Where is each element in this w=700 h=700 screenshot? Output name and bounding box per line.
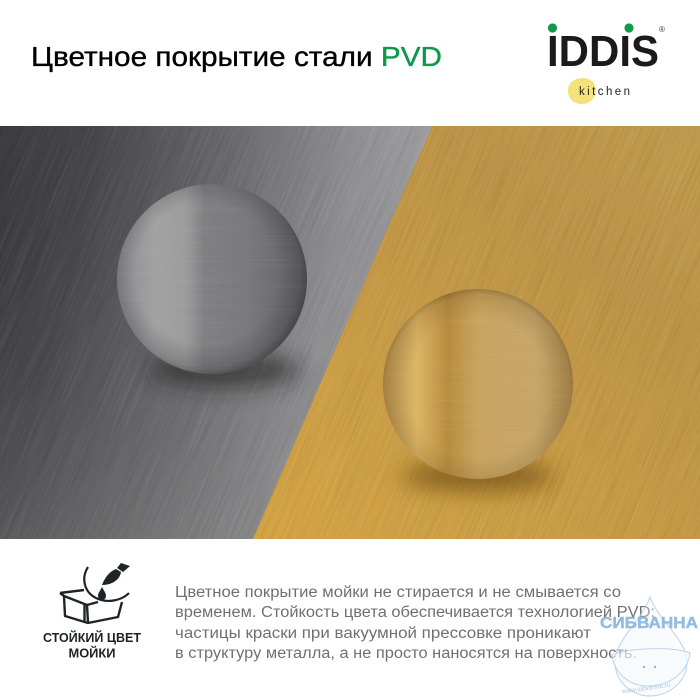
shadow: graphite sphere: [149, 352, 301, 388]
icon label: МОЙКИ: [68, 646, 116, 660]
watermark face: [643, 666, 656, 668]
watermark name: СИБВАННА: [600, 615, 698, 632]
icon: paint drop: [98, 587, 106, 600]
watermark: СИБВАННА: [600, 597, 698, 696]
icon: arc: [84, 567, 129, 601]
icon: brush: [102, 563, 130, 585]
logo blob: [568, 78, 596, 104]
panel: graphite steel: [0, 126, 440, 539]
body text: Цветное покрытие мойки не стирается и не смывается со: [175, 584, 621, 601]
shadow: gold sphere: [402, 461, 554, 491]
logo wordmark: IDDIS: [547, 27, 659, 76]
watermark drop: [615, 597, 687, 696]
title: Цветное покрытие стали PVD: [31, 41, 442, 72]
photo: metal surfaces: [0, 126, 700, 539]
logo dot left: [548, 23, 557, 33]
body text: в структуру металла, а не просто наносятся на поверхность.: [175, 645, 637, 662]
body text: временем. Стойкость цвета обеспечивается технологией PVD:: [175, 604, 655, 621]
icon label: [43, 630, 141, 660]
brushed texture: [0, 126, 700, 539]
logo dot right: [624, 23, 634, 33]
watermark bathtub: [612, 649, 690, 686]
brushed texture dark: [0, 126, 700, 539]
logo: IDDIS kitchen: [547, 23, 665, 104]
body text: [175, 584, 655, 662]
logo kitchen text: kitchen: [579, 86, 630, 98]
icon: paint box with brush: [60, 563, 130, 623]
icon label: СТОЙКИЙ ЦВЕТ: [43, 630, 141, 645]
graphite sphere: [117, 184, 307, 374]
gold sphere: [383, 289, 573, 479]
logo registered mark: ®: [659, 25, 665, 34]
panel: gold steel: [253, 126, 700, 539]
icon: box: [60, 590, 122, 623]
body text: частицы краски при вакуумной прессовке проникают: [175, 625, 591, 642]
watermark url: www.sibvanna.ru: [620, 682, 671, 696]
